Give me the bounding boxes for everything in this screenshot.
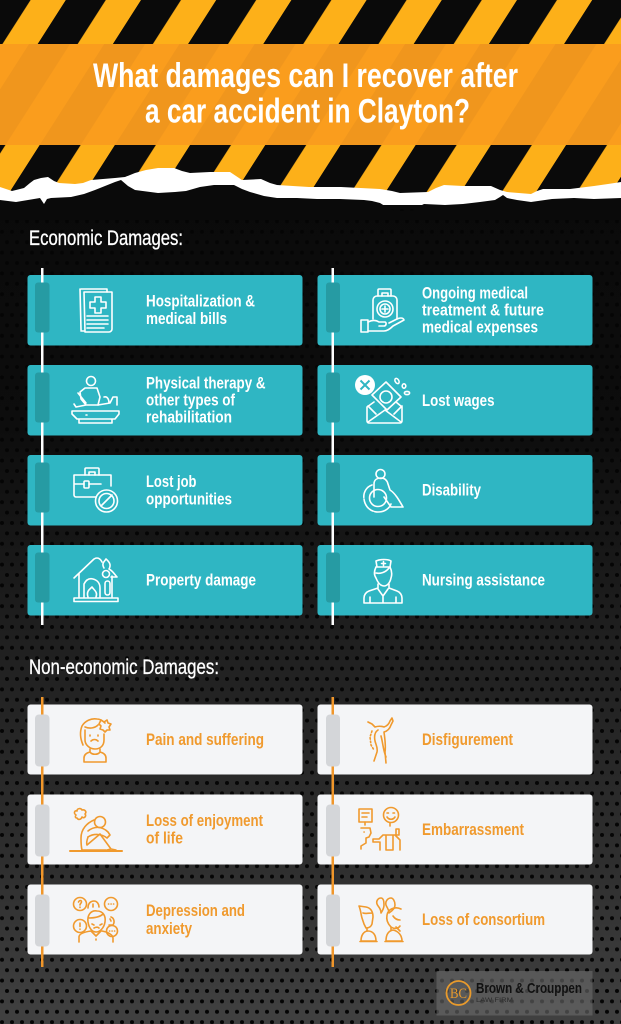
title: What damages can I recover after — [93, 57, 518, 95]
card: physical therapy: rehabilitation — [146, 408, 232, 426]
card: physical therapy: Physical therapy & — [146, 374, 266, 392]
card: loss of enjoyment: Loss of enjoyment — [146, 811, 263, 830]
heading: economic damages: Economic Damages: — [29, 227, 183, 250]
card: embarrassment — [318, 774, 592, 864]
card: disability — [318, 435, 592, 526]
card: ongoing treatment: Ongoing medical — [422, 284, 528, 302]
icon: physical therapy — [72, 376, 119, 423]
panel: economic damages, right column — [318, 268, 592, 625]
card: lost job opportunities: Lost job — [146, 472, 196, 491]
icon: wheelchair — [364, 470, 403, 512]
icon: couple with speech bubbles — [359, 898, 403, 942]
card: nursing assistance: Nursing assistance — [422, 570, 545, 590]
panel: non-economic damages, left column — [28, 697, 302, 967]
card: disfigurement: Disfigurement — [422, 730, 513, 749]
card: depression and anxiety: anxiety — [146, 919, 192, 938]
card: pain and suffering: Pain and suffering — [146, 730, 264, 749]
icon: hunched sad person — [70, 809, 122, 851]
icon: envelope with money — [367, 378, 410, 423]
card: hospitalization: medical bills — [146, 309, 227, 328]
torn paper edge — [0, 168, 621, 220]
panel: non-economic damages, right column — [318, 697, 592, 967]
hazard stripes: top — [0, 0, 621, 45]
logo: Brown & Crouppen Law Firm: LAW FIRM — [476, 997, 513, 1004]
icon: BC monogram: BC — [450, 986, 467, 1002]
card: depression and anxiety: Depression and — [146, 901, 245, 920]
card: lost job opportunities: opportunities — [146, 489, 232, 508]
icon: person in pain — [81, 719, 111, 762]
icon: nurse — [364, 560, 402, 603]
card: physical therapy: other types of — [146, 391, 235, 410]
card: property damage: Property damage — [146, 570, 256, 590]
icon: embarrassed people — [359, 808, 400, 850]
icon: first-aid kit on hand — [361, 289, 404, 332]
icon: scarred back — [368, 718, 393, 763]
card: disfigurement — [318, 704, 592, 774]
card: ongoing treatment — [318, 275, 592, 346]
card: ongoing treatment: medical expenses — [422, 318, 538, 336]
card: lost wages: Lost wages — [422, 391, 494, 410]
card: physical therapy — [28, 345, 302, 436]
icon: BC monogram — [446, 981, 470, 1005]
card: ongoing treatment: treatment & future — [422, 301, 544, 320]
title banner: a car accident in Clayton? — [145, 92, 470, 130]
card: lost wages — [318, 345, 592, 436]
card: embarrassment: Embarrassment — [422, 820, 524, 839]
card: loss of consortium — [318, 864, 592, 967]
card: loss of enjoyment: of life — [146, 828, 183, 847]
panel: economic damages, left column — [28, 268, 302, 625]
card: pain and suffering — [28, 704, 302, 774]
card: hospitalization — [28, 275, 302, 346]
card: hospitalization: Hospitalization & — [146, 291, 255, 310]
card: depression and anxiety — [28, 864, 302, 967]
heading: non-economic damages: Non-economic Damages: — [29, 656, 219, 679]
card: loss of consortium: Loss of consortium — [422, 910, 545, 929]
icon: cancel badge — [355, 375, 375, 395]
hazard stripes: bottom — [0, 145, 621, 195]
card: loss of enjoyment — [28, 774, 302, 864]
card: lost job opportunities — [28, 435, 302, 526]
icon: briefcase with prohibition sign — [74, 468, 118, 512]
card: nursing assistance — [318, 525, 592, 625]
logo: Brown & Crouppen Law Firm: Brown & Crouppen — [476, 980, 582, 997]
title banner — [0, 44, 621, 145]
icon: damaged house — [74, 558, 118, 602]
card: disability: Disability — [422, 480, 481, 500]
logo: Brown & Crouppen Law Firm — [436, 971, 592, 1016]
icon: anxious person with speech bubbles — [74, 898, 118, 942]
icon: medical document — [80, 289, 112, 332]
card: property damage — [28, 525, 302, 625]
